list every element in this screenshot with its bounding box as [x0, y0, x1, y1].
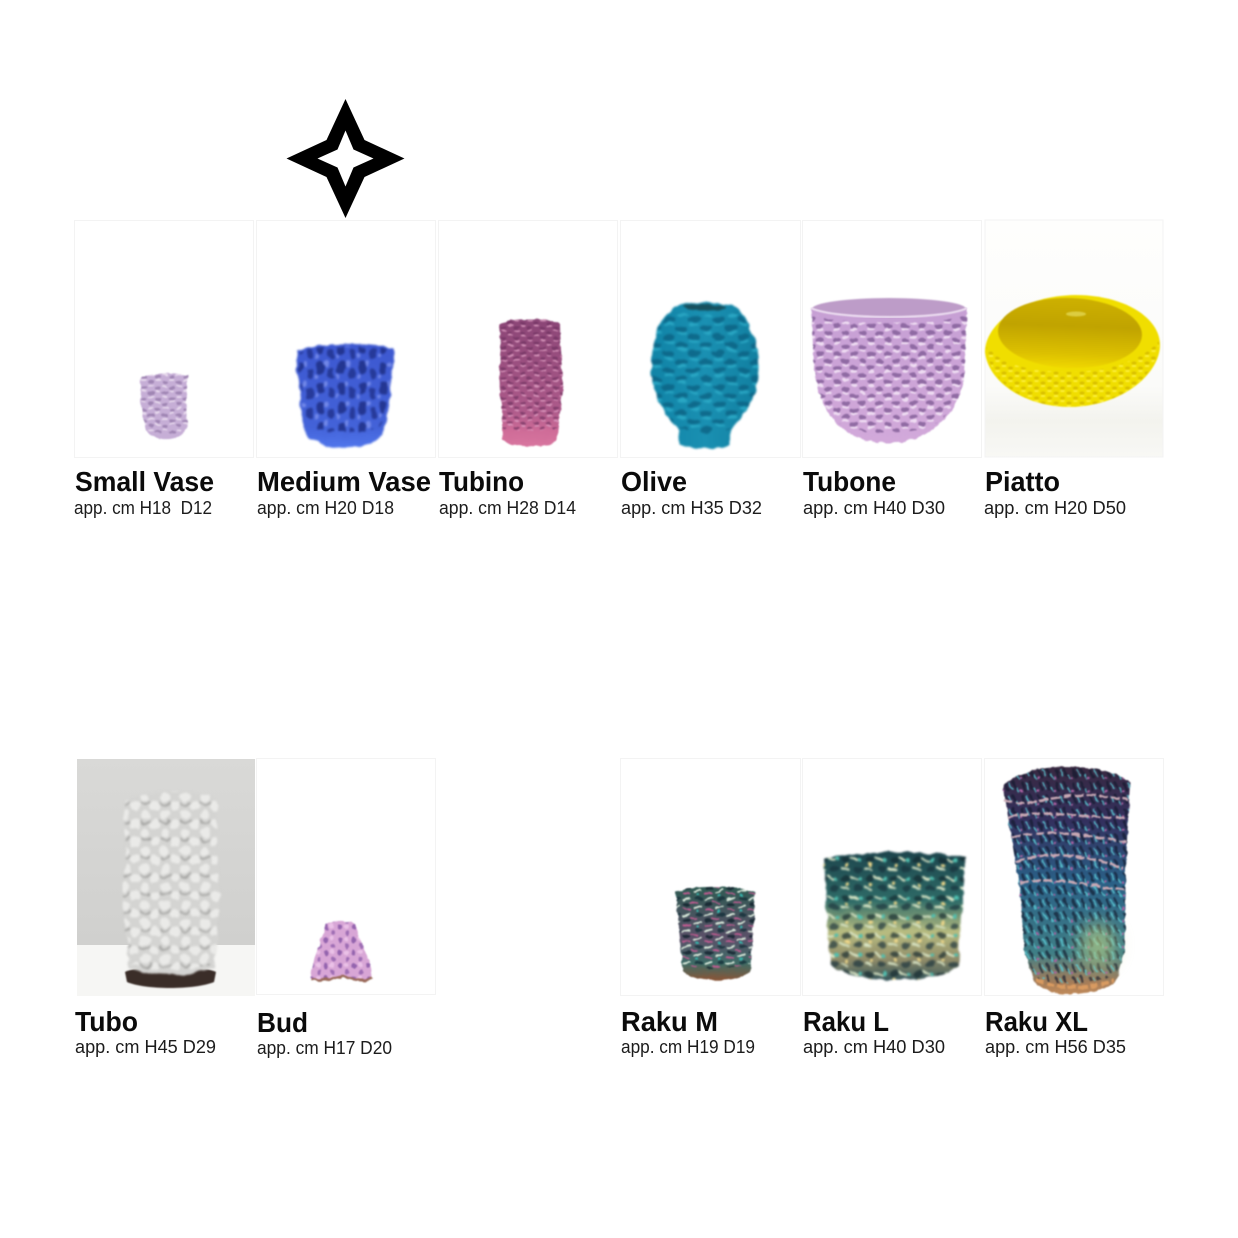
vase: iridescent raku L	[823, 852, 966, 980]
image frame	[620, 220, 800, 458]
dimensions: app. cm H45 D29	[75, 1037, 216, 1057]
image frame	[438, 220, 618, 458]
vase: olive teal	[651, 302, 759, 448]
card: Tubone	[802, 220, 982, 518]
name: Raku XL	[985, 1006, 1088, 1037]
dimensions: app. cm H18 D12	[74, 498, 212, 518]
image frame	[74, 220, 254, 458]
dimensions: app. cm H40 D30	[803, 1037, 945, 1057]
card: Raku L	[802, 758, 982, 1057]
icon: four-pointed star	[286, 99, 404, 218]
dimensions: app. cm H28 D14	[439, 498, 576, 518]
image frame	[802, 758, 982, 996]
vase: white tubo	[122, 791, 220, 988]
vase: medium blue	[297, 344, 393, 448]
vase: iridescent raku M	[676, 887, 755, 980]
card: Medium Vase	[256, 220, 436, 518]
image frame	[256, 220, 436, 458]
vase: small lavender	[140, 374, 188, 439]
name: Raku M	[621, 1006, 718, 1037]
card: Raku XL	[984, 758, 1164, 1057]
image frame	[620, 758, 800, 996]
dimensions: app. cm H17 D20	[257, 1038, 392, 1058]
image frame	[802, 220, 982, 458]
dimensions: app. cm H35 D32	[621, 498, 762, 518]
name: Piatto	[985, 466, 1060, 497]
card: Bud	[256, 758, 436, 1058]
image frame	[985, 220, 1163, 457]
card: Tubo	[75, 759, 255, 1057]
vase: pink bud	[311, 921, 372, 981]
name: Small Vase	[75, 466, 214, 497]
name: Raku L	[803, 1006, 889, 1037]
dimensions: app. cm H40 D30	[803, 498, 945, 518]
image frame	[984, 758, 1164, 996]
card: Piatto	[984, 220, 1163, 518]
vase: tubino rose	[499, 319, 563, 447]
card: Olive	[620, 220, 800, 518]
name: Olive	[621, 466, 687, 497]
dimensions: app. cm H20 D50	[984, 498, 1126, 518]
image frame	[256, 758, 436, 994]
name: Tubino	[439, 466, 524, 497]
name: Tubo	[75, 1006, 138, 1037]
vase: tubone lilac	[811, 298, 967, 443]
name: Tubone	[803, 466, 896, 497]
dimensions: app. cm H19 D19	[621, 1037, 755, 1057]
bowl: yellow piatto	[985, 295, 1160, 407]
vase: iridescent raku XL	[1003, 767, 1130, 994]
dimensions: app. cm H56 D35	[985, 1037, 1126, 1057]
card: Small Vase	[74, 220, 254, 518]
card: Raku M	[620, 758, 800, 1057]
dimensions: app. cm H20 D18	[257, 498, 394, 518]
name: Medium Vase	[257, 466, 431, 497]
name: Bud	[257, 1007, 308, 1038]
image frame	[77, 759, 255, 996]
card: Tubino	[438, 220, 618, 518]
